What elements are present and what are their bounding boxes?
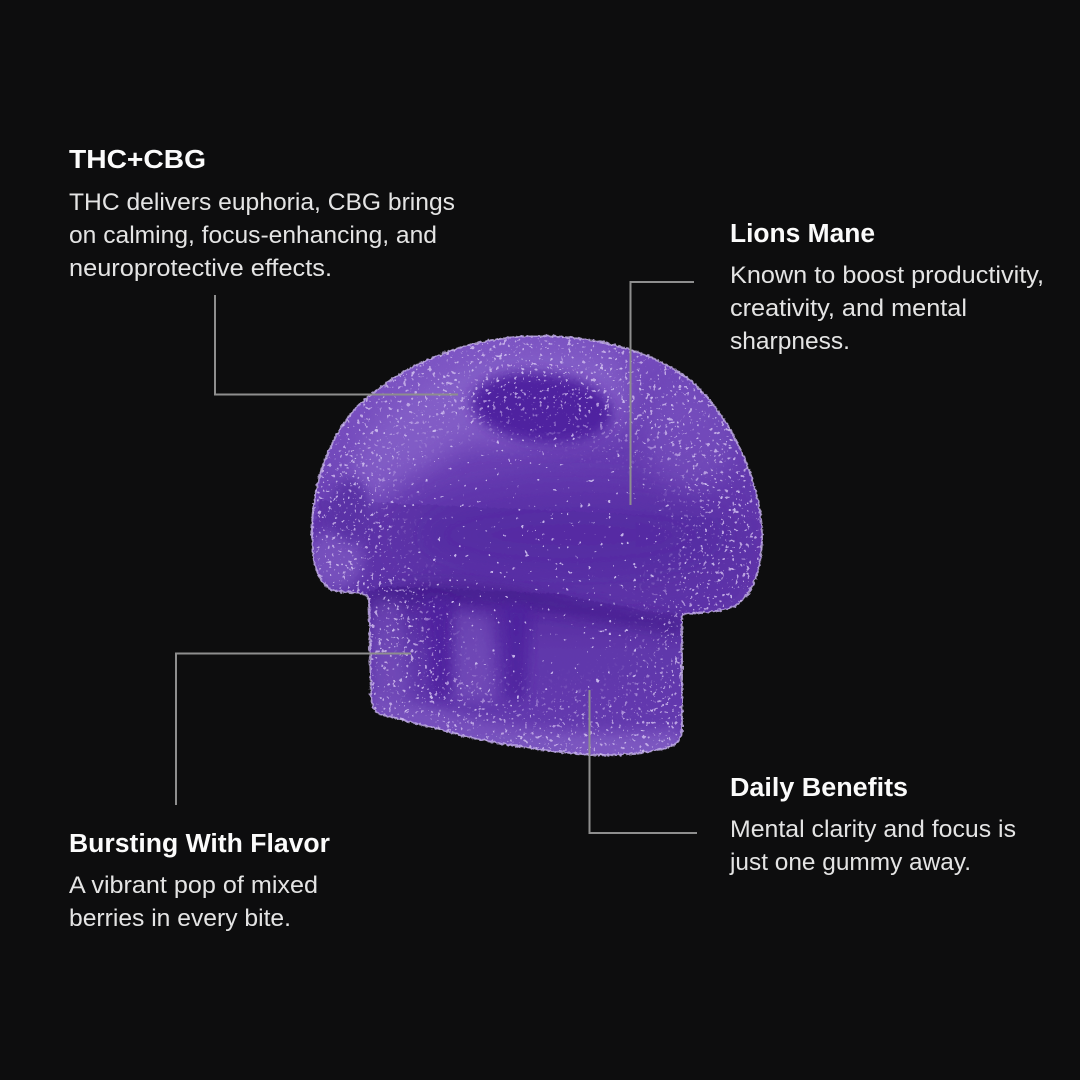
gummy stem middle groove — [503, 604, 530, 702]
heading: Daily Benefits: Daily Benefits — [730, 774, 908, 802]
gummy cap highlight band — [346, 350, 629, 520]
gummy stem left light — [372, 600, 410, 700]
text: Daily Benefits description: just one gummy away. — [729, 849, 971, 876]
text: THC+CBG description — [69, 189, 455, 282]
gummy illustration — [300, 325, 775, 770]
leader line: THC+CBG — [215, 295, 458, 394]
leader line: Daily Benefits — [590, 690, 697, 833]
gummy cap underside shadow — [365, 580, 684, 636]
text: Bursting With Flavor description: berries in every bite. — [69, 905, 291, 932]
gummy rim frost — [312, 336, 762, 755]
gummy stem — [367, 586, 680, 756]
text: Bursting With Flavor description: A vibrant pop of mixed — [69, 872, 318, 899]
heading: Bursting With Flavor: Bursting With Flavor — [69, 830, 330, 858]
leader line: Lions Mane — [630, 282, 694, 505]
gummy top hollow — [468, 366, 616, 450]
text: THC+CBG description: on calming, focus-enhancing, and — [69, 222, 437, 249]
text: Lions Mane description: creativity, and mental — [730, 295, 967, 322]
gummy left lobe highlight — [307, 530, 363, 590]
heading: THC+CBG: THC+CBG — [69, 146, 206, 174]
callout: Bursting With Flavor — [69, 654, 411, 932]
gummy stem left groove — [425, 598, 452, 699]
sugar crystals sparse — [316, 338, 760, 756]
gummy bottom light band — [372, 695, 680, 760]
text: Daily Benefits description: Mental clarity and focus is — [730, 816, 1016, 843]
sugar crystals dense at edges — [300, 325, 775, 765]
text: Lions Mane description — [730, 262, 1044, 355]
gummy cap lower lobe — [313, 499, 700, 609]
text: Lions Mane description: Known to boost productivity, — [730, 262, 1044, 289]
gummy right shoulder highlight — [648, 392, 734, 492]
text: Bursting With Flavor description — [69, 872, 318, 932]
text: THC+CBG description: neuroprotective effects. — [69, 255, 332, 282]
gummy left dimple — [330, 478, 370, 542]
leader line: Bursting With Flavor — [176, 654, 411, 805]
callout: THC+CBG — [69, 146, 458, 394]
gummy stem light ridge — [455, 610, 495, 700]
text: Daily Benefits description — [729, 816, 1016, 876]
callout: Lions Mane — [630, 220, 1044, 505]
callout: Daily Benefits — [590, 690, 1016, 876]
heading: Lions Mane: Lions Mane — [730, 220, 875, 248]
text: THC+CBG description: THC delivers euphoria, CBG brings — [69, 189, 455, 216]
text: Lions Mane description: sharpness. — [730, 328, 850, 355]
gummy deep centre tone — [427, 485, 715, 575]
